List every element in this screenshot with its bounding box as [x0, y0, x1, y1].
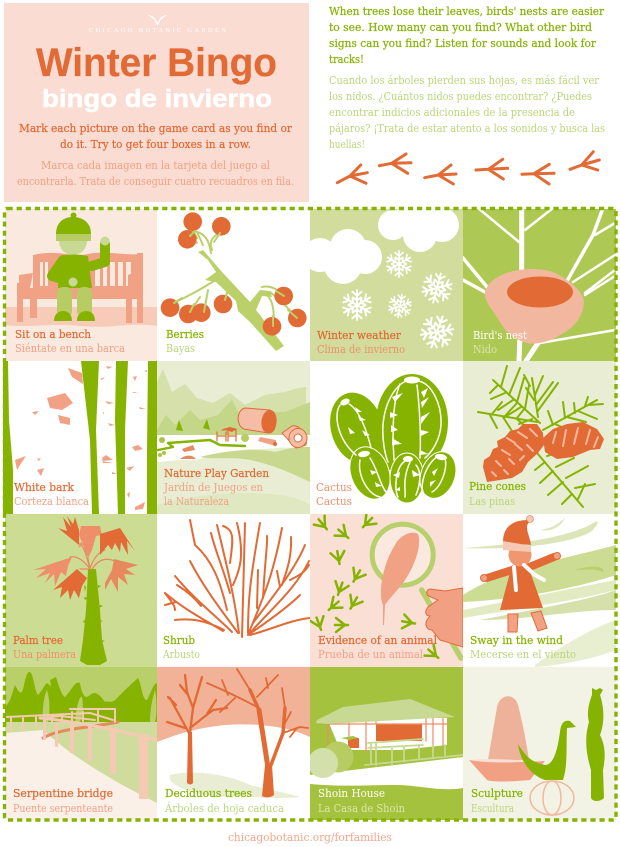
ground — [5, 307, 157, 327]
trees — [5, 667, 157, 722]
label: Sculpture — [471, 786, 523, 800]
label — [470, 633, 576, 661]
panel: sculpture — [463, 667, 616, 820]
pale ground — [5, 730, 157, 820]
label — [166, 327, 204, 355]
icon: animal tracks — [310, 513, 443, 663]
wind swirls — [463, 518, 616, 667]
instructions Spanish: encontrarla. Trata de conseguir cuatro recuadros en fila. — [17, 174, 294, 188]
label — [469, 479, 526, 508]
label: Cactus — [316, 494, 352, 508]
text block: bird nests English: to see. How many can you find? What other bird — [329, 20, 593, 34]
icon: bird tracks row — [337, 152, 599, 184]
panel: shoin house — [310, 667, 463, 820]
label: La Casa de Shoin — [318, 801, 405, 815]
icon: magnifying glass lens — [372, 524, 433, 585]
icon: log tube small — [282, 426, 307, 448]
icon: tree small — [167, 675, 227, 784]
label: Shoin House — [318, 786, 385, 800]
label: Sway in the wind — [470, 633, 564, 647]
label — [13, 633, 76, 661]
panel: bird's nest — [463, 209, 616, 361]
label — [317, 328, 405, 356]
panel: evidence of an animal — [310, 514, 463, 667]
icon: green path — [158, 440, 245, 450]
panel: shrub — [162, 519, 310, 661]
icon: tree large — [207, 669, 308, 797]
icon: magnifying glass handle — [422, 590, 461, 658]
white ground — [310, 757, 463, 789]
text block: bird nests English: tracks! — [329, 52, 364, 66]
label: Árboles de hoja caduca — [164, 801, 284, 815]
sky hill — [157, 667, 310, 742]
label: Puente serpenteante — [13, 801, 113, 815]
label: Bayas — [166, 341, 195, 355]
icon: white branches — [463, 205, 615, 361]
panel: white bark — [3, 361, 157, 514]
label: Clima de invierno — [317, 342, 405, 356]
label — [318, 633, 437, 661]
icon: cone sculpture — [469, 696, 545, 782]
text block: bird nests English — [329, 4, 604, 66]
icon: serpentine bridge — [6, 709, 157, 799]
label: Palm tree — [13, 633, 63, 647]
label: Berries — [166, 327, 204, 341]
tree shadow — [169, 773, 300, 798]
label: Sit on a bench — [15, 327, 92, 341]
icon: bark patches — [15, 366, 147, 510]
text block: bird nests Spanish: encontrar indicios adicionales de la presencia de — [329, 105, 575, 119]
panel: sway in the wind — [463, 515, 616, 667]
text block: bird nests English: signs can you find? Listen for sounds and look for — [329, 36, 596, 50]
logo text: CHICAGO BOTANIC GARDEN — [89, 27, 226, 34]
icon: bird sculpture — [518, 721, 576, 780]
panel: palm tree — [5, 514, 157, 667]
label: la Naturaleza — [164, 494, 229, 508]
panel: nature play garden — [157, 361, 310, 514]
panel: serpentine bridge — [5, 667, 157, 820]
icon: pine needles — [478, 366, 603, 507]
icon: cactus group — [322, 374, 462, 505]
label — [316, 480, 352, 508]
icon: child on bench — [52, 212, 110, 321]
label — [14, 480, 89, 508]
label: Siéntate en una barca — [15, 341, 125, 355]
icon: garden logo — [147, 15, 168, 25]
label: Prueba de un animal — [318, 647, 423, 661]
label: Cactus — [316, 480, 352, 494]
label: Pine cones — [469, 479, 526, 493]
label: Nido — [473, 342, 497, 356]
icon: snowflakes — [342, 251, 458, 353]
icon: clouds — [303, 192, 459, 284]
dotted bingo card border — [4, 208, 616, 820]
icon: hand — [426, 588, 463, 647]
label — [471, 786, 523, 815]
label: Bird's nest — [473, 328, 527, 342]
icon: bench — [17, 253, 143, 323]
panel: deciduous trees — [157, 667, 310, 815]
label: Deciduous trees — [165, 786, 252, 800]
label: Winter weather — [317, 328, 401, 342]
icon: pine cones — [483, 422, 604, 482]
label: Jardín de Juegos en — [163, 480, 264, 494]
label: Serpentine bridge — [13, 786, 113, 800]
instructions English — [19, 121, 292, 151]
panel: winter weather — [310, 209, 463, 361]
label: Las pinas — [469, 494, 515, 508]
icon: palm trunk — [80, 569, 107, 665]
instructions English: Mark each picture on the game card as you find or — [19, 121, 292, 135]
icon: berry branch — [161, 212, 307, 351]
label: Una palmera — [13, 647, 76, 661]
icon: palm fronds — [33, 516, 138, 600]
icon: play log and table — [217, 427, 277, 446]
icon: feather — [381, 533, 419, 625]
text block: bird nests Spanish — [329, 73, 605, 151]
garden landscape — [157, 369, 310, 514]
panel: sit on a bench — [5, 209, 157, 361]
label — [162, 633, 200, 661]
panel: pine cones — [463, 361, 616, 514]
instructions Spanish — [17, 158, 294, 188]
icon: nest — [485, 269, 584, 344]
icon: bushes — [308, 742, 354, 778]
label — [318, 786, 405, 815]
label: White bark — [14, 480, 75, 494]
icon: ring sphere sculpture — [530, 781, 574, 815]
label — [164, 786, 284, 815]
icon: tall figure sculpture — [586, 688, 605, 801]
icon: house — [316, 699, 463, 765]
label: Evidence of an animal — [318, 633, 437, 647]
icon: shrub branches — [165, 520, 310, 637]
label: Escultura — [471, 801, 514, 815]
subtitle: bingo de invierno — [42, 85, 272, 113]
icon: girl in red hat — [480, 516, 560, 632]
panel: title block — [4, 3, 309, 202]
instructions Spanish: Marca cada imagen en la tarjeta del juego al — [41, 158, 270, 172]
text block: bird nests Spanish: huellas! — [329, 137, 365, 151]
title: Winter Bingo — [36, 41, 277, 85]
label: Nature Play Garden — [164, 466, 270, 480]
label — [163, 466, 270, 508]
icon: birch trunks — [3, 361, 157, 514]
panel: berries — [160, 212, 307, 355]
label — [473, 328, 527, 356]
panel: cactus — [316, 374, 456, 508]
label — [13, 786, 113, 815]
instructions English: do it. Try to get four boxes in a row. — [60, 137, 251, 151]
label — [15, 327, 125, 355]
footer url: chicagobotanic.org/forfamilies — [228, 830, 392, 844]
icon: log tube large — [238, 408, 277, 433]
label: Mecerse en el viento — [470, 647, 576, 661]
label: Shrub — [163, 633, 195, 647]
label: Corteza blanca — [14, 494, 89, 508]
label: Arbusto — [162, 647, 200, 661]
